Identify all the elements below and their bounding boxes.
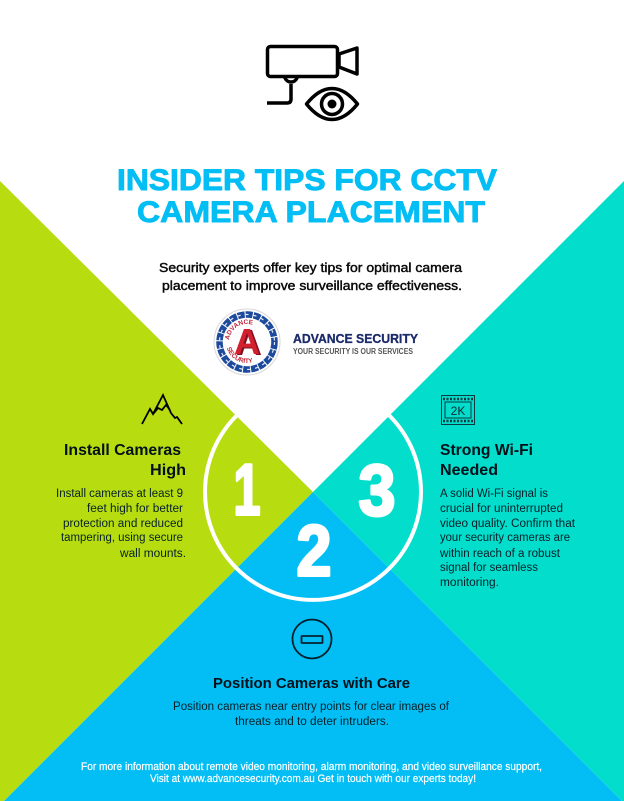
intro text: Security experts offer key tips for optimal camera	[159, 260, 463, 275]
body text: your security cameras are	[440, 532, 570, 544]
icon: circle with minus bar	[292, 620, 332, 658]
panel shape: green left triangle	[0, 181, 313, 801]
footer text	[81, 761, 542, 785]
body text	[439, 488, 576, 589]
heading: Needed	[440, 462, 498, 479]
title: INSIDER TIPS FOR CCTV	[117, 164, 497, 197]
logo: Advance Security	[214, 308, 418, 376]
logo tagline: YOUR SECURITY IS OUR SERVICES	[293, 347, 414, 356]
body text: Install cameras at least 9	[56, 488, 183, 500]
body text: signal for seamless	[440, 562, 538, 574]
intro text	[159, 260, 463, 293]
logo badge	[214, 308, 280, 376]
number 3: 3	[358, 451, 396, 531]
panel shape: teal right triangle	[313, 181, 624, 801]
logo badge: ADVANCE	[225, 320, 253, 340]
body text	[173, 701, 450, 728]
title	[117, 164, 497, 229]
footer text: For more information about remote video monitoring, alarm monitoring, and video surveillance support,	[81, 761, 542, 773]
body text: within reach of a robust	[439, 548, 561, 560]
body text: protection and reduced	[63, 518, 183, 530]
number 2: 2	[296, 512, 332, 592]
heading: High	[150, 462, 186, 479]
logo badge: SECURITY	[227, 347, 252, 363]
body text	[56, 488, 186, 560]
body text: monitoring.	[440, 577, 499, 589]
body text: video quality. Confirm that	[440, 518, 576, 530]
heading	[64, 442, 186, 479]
body text: Position cameras near entry points for clear images of	[173, 701, 450, 713]
body text: feet high for better	[87, 503, 183, 515]
body text: crucial for uninterrupted	[440, 503, 563, 515]
white open circle arc	[205, 416, 421, 600]
heading: Position Cameras with Care	[213, 676, 410, 692]
body text: A solid Wi-Fi signal is	[440, 488, 548, 500]
heading: Install Cameras	[64, 442, 181, 459]
panel text: Strong Wi-Fi Needed	[439, 442, 576, 589]
icon: 2K video frame	[442, 396, 474, 424]
logo badge: A	[236, 322, 262, 363]
icon: mountain	[142, 395, 182, 424]
body text: tampering, using secure	[61, 532, 183, 544]
heading	[440, 442, 533, 479]
icon: security camera and eye	[267, 46, 358, 120]
heading: Strong Wi-Fi	[440, 442, 533, 459]
title: CAMERA PLACEMENT	[137, 196, 485, 229]
logo badge: A	[234, 321, 260, 362]
footer text: Visit at www.advancesecurity.com.au Get in touch with our experts today!	[150, 773, 476, 785]
icon: 2K video frame: 2K	[451, 404, 465, 418]
panel text: Position Cameras with Care	[173, 676, 450, 728]
panel text: Install Cameras High	[56, 442, 186, 560]
body text: threats and to deter intruders.	[235, 716, 389, 728]
panel shape: blue bottom triangle	[4, 492, 622, 801]
body text: wall mounts.	[119, 548, 186, 560]
logo wordmark: ADVANCE SECURITY	[293, 331, 418, 346]
intro text: placement to improve surveillance effectiveness.	[162, 278, 462, 293]
number 1: 1	[234, 450, 260, 530]
